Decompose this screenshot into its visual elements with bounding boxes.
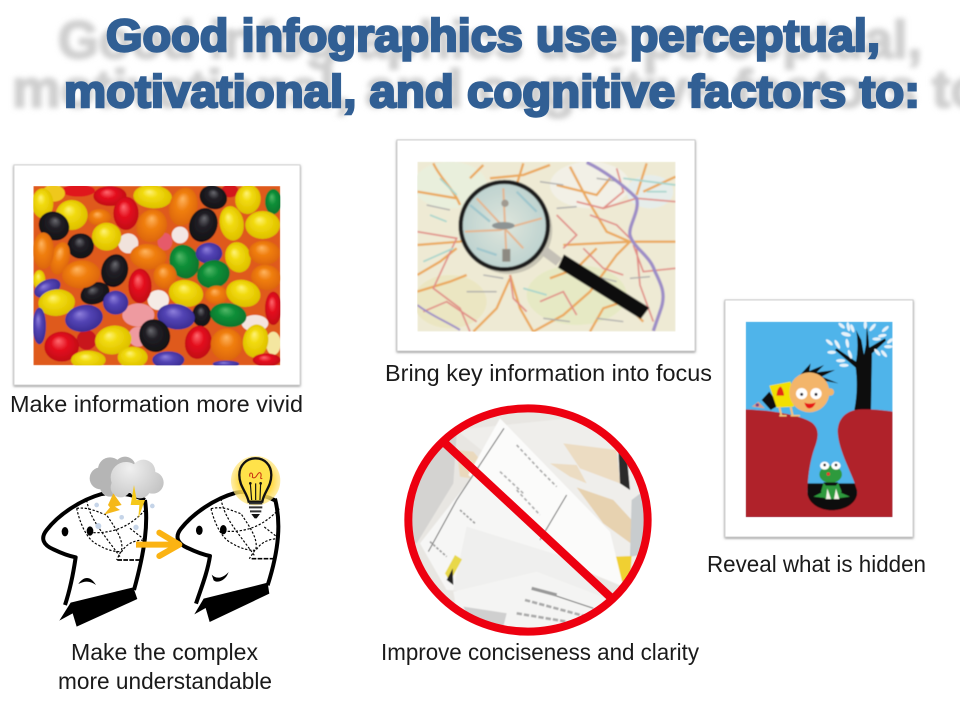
- picture frame: boy and frog: [725, 300, 913, 537]
- icon: storm cloud: [90, 457, 164, 530]
- panel: magnifier on map: [385, 140, 712, 386]
- title: motivational, and cognitive factors to:: [64, 66, 920, 117]
- panel: complex to understandable: [43, 456, 280, 694]
- title shadow: Good infographics use perceptual,: [58, 11, 922, 70]
- caption: understandable: more understandable: [58, 668, 272, 694]
- river: [587, 162, 663, 331]
- photo: map with magnifying glass: [413, 162, 676, 332]
- lens shadow: [486, 212, 553, 274]
- photo: jelly beans: [31, 182, 283, 369]
- leaves: [825, 321, 894, 367]
- lens: [461, 182, 548, 269]
- ferrule: [543, 248, 564, 266]
- photo frame: jelly beans: [14, 165, 300, 385]
- red slash: [443, 442, 612, 598]
- title: [64, 10, 920, 117]
- title: Good infographics use perceptual,: [106, 10, 880, 61]
- illustration: boy and frog: [746, 321, 894, 517]
- title shadow: [12, 11, 960, 119]
- caption: understandable: [58, 639, 272, 694]
- frog: [813, 462, 850, 499]
- boy: [752, 363, 838, 416]
- panel: reveal what is hidden: [707, 300, 926, 577]
- caption: understandable: Make the complex: [71, 639, 258, 665]
- ground: [746, 409, 893, 517]
- caption: clarity: Improve conciseness and clarity: [381, 639, 699, 665]
- panel: conciseness: [381, 405, 699, 665]
- tree: [835, 327, 886, 410]
- caption: vivid: Make information more vivid: [10, 391, 303, 417]
- head: confused: [43, 493, 146, 627]
- red ring: [408, 408, 648, 632]
- arrow: [136, 533, 179, 556]
- hole interior: [807, 483, 857, 515]
- illustration: two heads: [43, 456, 280, 627]
- photo frame: map: [397, 140, 695, 351]
- photo: paper clutter: [412, 412, 644, 628]
- hair: [800, 363, 838, 383]
- title shadow: motivational, and cognitive factors to:: [12, 60, 960, 119]
- panel: jelly beans: [10, 165, 303, 417]
- caption: hidden: Reveal what is hidden: [707, 551, 926, 577]
- head: understanding: [178, 492, 279, 622]
- handle: [558, 254, 649, 319]
- icon: light bulb: [231, 456, 280, 518]
- caption: focus: Bring key information into focus: [385, 360, 712, 386]
- icon: prohibited paperwork: [405, 405, 653, 635]
